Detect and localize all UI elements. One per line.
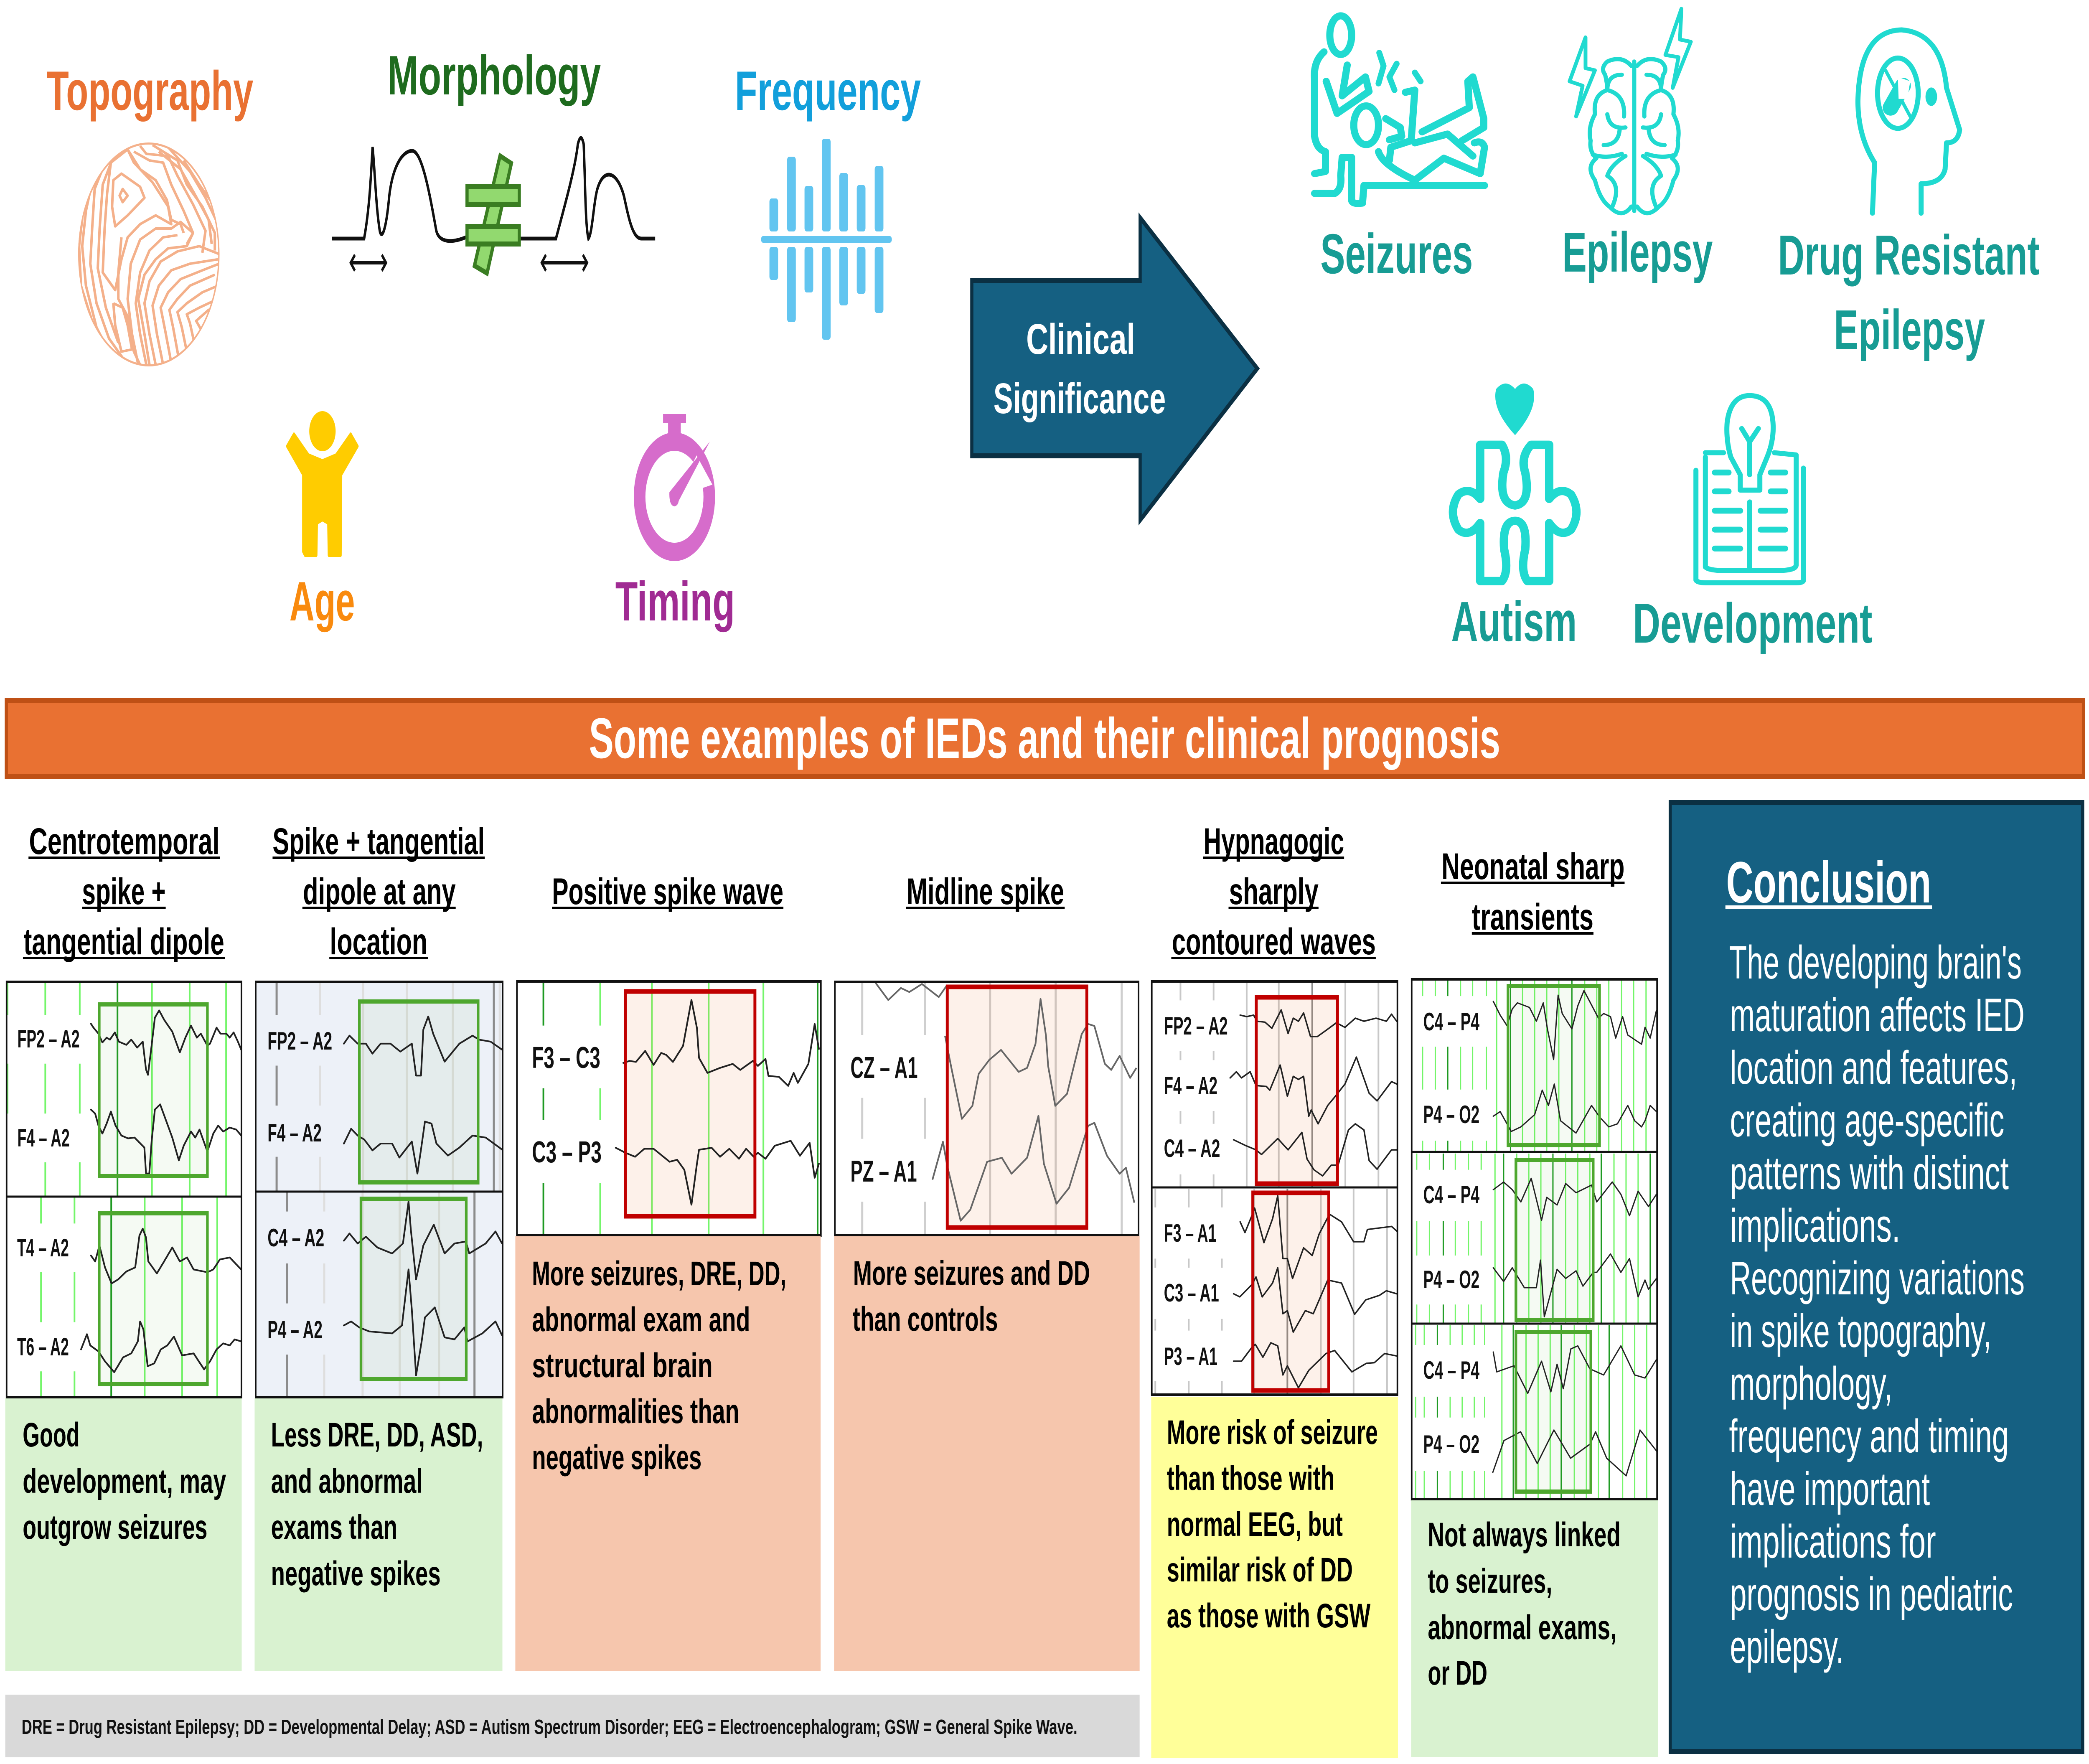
prognosis box: centrotemporal: outgrow seizures — [23, 1508, 207, 1546]
label: Drug Resistant Epilepsy: Drug Resistant — [1778, 224, 2040, 287]
icon: stopwatch (timing) — [640, 414, 712, 552]
prognosis box: spike with dipole: negative spikes — [271, 1554, 441, 1593]
column heading: Spike + tangential dipole at any location — [272, 821, 485, 962]
prognosis box: midline spike — [834, 1236, 1140, 1671]
text: conclusion body: prognosis in pediatric — [1730, 1568, 2013, 1620]
text: conclusion body: implications for — [1730, 1515, 1936, 1568]
column heading: Spike + tangential dipole at any location: location — [330, 921, 427, 962]
banner: examples of IEDs: Some examples of IEDs and their clinical prognosis — [589, 707, 1500, 770]
prognosis box: centrotemporal — [5, 1398, 242, 1671]
text: conclusion body: patterns with distinct — [1730, 1146, 2009, 1199]
heading: Age: Age — [290, 570, 355, 633]
prognosis box: neonatal: Not always linked — [1428, 1515, 1621, 1554]
prognosis box: spike with dipole: Less DRE, DD, ASD, — [271, 1416, 483, 1454]
panel: EEG centrotemporal spike: T6 – A2 — [17, 1333, 69, 1361]
text: conclusion body: location and features, — [1730, 1041, 2017, 1094]
prognosis box: positive spike wave: More seizures, DRE, DD, — [532, 1254, 786, 1293]
panel: EEG hypnagogic sharply contoured waves — [1152, 981, 1398, 1395]
arrow: clinical significance: Significance — [994, 375, 1166, 423]
heading: Morphology: Morphology — [387, 44, 601, 107]
icon: topographic contour map — [79, 143, 219, 367]
text: conclusion body: maturation affects IED — [1730, 989, 2025, 1041]
label: Drug Resistant Epilepsy: Epilepsy — [1834, 298, 1985, 361]
icon: head with crossed-out pill — [1858, 30, 1959, 213]
text: conclusion body — [1729, 936, 2025, 1673]
column heading: Hypnagogic sharply contoured waves: Hypnagogic — [1204, 821, 1344, 862]
text: conclusion body: in spike topography, — [1730, 1304, 1991, 1357]
prognosis box: neonatal: abnormal exams, — [1428, 1608, 1617, 1647]
panel: EEG positive spike wave: F3 – C3 — [532, 1040, 600, 1075]
icon: child figure (age) — [287, 411, 358, 555]
heading: Frequency: Frequency — [735, 59, 921, 122]
prognosis box: midline spike: More seizures and DD — [853, 1254, 1090, 1292]
prognosis box: spike with dipole: and abnormal — [271, 1462, 423, 1500]
legend: abbreviations: DRE = Drug Resistant Epilepsy; DD = Developmental Delay; ASD = Autism Spectrum Disorder; EEG = Electroencephalogram; GSW = General Spike Wave. — [22, 1716, 1078, 1739]
prognosis box: positive spike wave: negative spikes — [532, 1438, 701, 1477]
prognosis box: positive spike wave: abnormalities than — [532, 1392, 740, 1431]
column heading: Centrotemporal spike + tangential dipole: Centrotemporal — [29, 821, 219, 862]
panel: EEG hypnagogic sharply contoured waves: C4 – A2 — [1164, 1134, 1220, 1162]
panel: EEG neonatal sharp transients: P4 – O2 — [1423, 1101, 1479, 1129]
panel: EEG positive spike wave: C3 – P3 — [532, 1135, 602, 1169]
text: conclusion body: epilepsy. — [1730, 1620, 1844, 1673]
label: Seizures: Seizures — [1320, 222, 1473, 285]
panel: EEG spike with tangential dipole at any location: C4 – A2 — [267, 1224, 324, 1252]
icon: frequency bars — [761, 139, 892, 340]
prognosis box: spike with dipole — [254, 1398, 502, 1671]
text: conclusion body: creating age-specific — [1730, 1094, 2004, 1146]
panel: EEG midline spike: PZ – A1 — [850, 1154, 917, 1188]
prognosis box: centrotemporal: development, may — [23, 1462, 226, 1500]
panel: EEG positive spike wave — [517, 981, 821, 1235]
panel: EEG neonatal sharp transients — [1412, 979, 1657, 1500]
column heading: Hypnagogic sharply contoured waves — [1171, 821, 1376, 962]
prognosis box: hypnagogic: than those with — [1167, 1459, 1334, 1497]
label: Drug Resistant Epilepsy — [1778, 224, 2040, 361]
icon: seizures — [1314, 16, 1484, 203]
prognosis box: hypnagogic: similar risk of DD — [1167, 1550, 1353, 1589]
panel: EEG spike with tangential dipole at any location — [256, 982, 503, 1397]
column heading: Centrotemporal spike + tangential dipole: spike + — [82, 871, 166, 912]
column heading: Centrotemporal spike + tangential dipole — [23, 821, 225, 962]
prognosis box: hypnagogic: normal EEG, but — [1167, 1505, 1343, 1543]
text: conclusion body: have important — [1730, 1462, 1930, 1515]
column heading: Spike + tangential dipole at any location: dipole at any — [303, 871, 456, 912]
panel: EEG hypnagogic sharply contoured waves: F4 – A2 — [1164, 1072, 1217, 1100]
panel: EEG hypnagogic sharply contoured waves: FP2 – A2 — [1164, 1012, 1228, 1040]
prognosis box: positive spike wave: structural brain — [532, 1346, 713, 1385]
panel: EEG neonatal sharp transients: C4 – P4 — [1423, 1356, 1479, 1384]
label: Autism: Autism — [1451, 590, 1577, 653]
arrow: clinical significance — [972, 218, 1257, 520]
panel: EEG neonatal sharp transients: C4 – P4 — [1423, 1181, 1479, 1209]
column heading: Neonatal sharp transients: Neonatal sharp — [1441, 846, 1624, 887]
heading: Conclusion: Conclusion — [1726, 849, 1931, 915]
icon: puzzle piece with heart — [1453, 384, 1576, 581]
prognosis box: spike with dipole: exams than — [271, 1508, 397, 1546]
prognosis box: hypnagogic: More risk of seizure — [1167, 1413, 1378, 1451]
panel: EEG spike with tangential dipole at any location: FP2 – A2 — [267, 1027, 332, 1055]
text: conclusion body: morphology, — [1730, 1357, 1892, 1410]
prognosis box: hypnagogic: as those with GSW — [1167, 1596, 1371, 1635]
icon: open book with light bulb — [1696, 396, 1804, 583]
heading: Timing: Timing — [615, 570, 735, 633]
panel: EEG hypnagogic sharply contoured waves: P3 – A1 — [1164, 1342, 1217, 1370]
prognosis box: hypnagogic — [1151, 1397, 1398, 1758]
panel: EEG spike with tangential dipole at any location: P4 – A2 — [267, 1316, 323, 1344]
panel: EEG centrotemporal spike — [7, 982, 241, 1397]
panel: EEG midline spike: CZ – A1 — [850, 1050, 918, 1085]
heading: Topography: Topography — [47, 59, 253, 122]
arrow: clinical significance: Clinical — [1026, 315, 1135, 363]
column heading: Centrotemporal spike + tangential dipole: tangential dipole — [23, 921, 224, 962]
panel: EEG neonatal sharp transients: C4 – P4 — [1423, 1008, 1479, 1036]
panel: conclusion — [1670, 803, 2083, 1751]
banner: examples of IEDs — [6, 700, 2084, 776]
prognosis box: positive spike wave — [515, 1236, 821, 1671]
prognosis box: centrotemporal: Good — [23, 1416, 80, 1454]
column heading: Hypnagogic sharply contoured waves: contoured waves — [1172, 921, 1376, 962]
prognosis box: positive spike wave: abnormal exam and — [532, 1300, 750, 1339]
label: Epilepsy: Epilepsy — [1562, 221, 1713, 284]
panel: EEG spike with tangential dipole at any location: F4 – A2 — [267, 1119, 322, 1147]
panel: EEG neonatal sharp transients: P4 – O2 — [1423, 1430, 1479, 1458]
legend: abbreviations — [5, 1695, 1140, 1757]
prognosis box: neonatal: to seizures, — [1428, 1562, 1552, 1600]
column heading: Spike + tangential dipole at any location: Spike + tangential — [272, 821, 485, 862]
icon: brain with lightning — [1570, 9, 1691, 213]
panel: EEG midline spike — [835, 982, 1139, 1235]
icon: morphology waveforms with not-equal sign — [332, 138, 655, 273]
column heading: Hypnagogic sharply contoured waves: sharply — [1229, 871, 1319, 912]
prognosis box: midline spike: than controls — [853, 1300, 998, 1338]
label: Development: Development — [1633, 592, 1872, 655]
panel: EEG centrotemporal spike: FP2 – A2 — [18, 1025, 80, 1053]
column heading: Positive spike wave: Positive spike wave — [552, 871, 783, 912]
column heading: Neonatal sharp transients: transients — [1472, 896, 1593, 938]
prognosis box: neonatal: or DD — [1428, 1654, 1487, 1692]
panel: EEG hypnagogic sharply contoured waves: F3 – A1 — [1164, 1219, 1216, 1247]
text: conclusion body: The developing brain's — [1729, 936, 2022, 989]
column heading: Neonatal sharp transients — [1441, 846, 1624, 938]
prognosis box: neonatal — [1411, 1500, 1658, 1757]
panel: EEG centrotemporal spike: F4 – A2 — [18, 1124, 70, 1152]
panel: EEG neonatal sharp transients: P4 – O2 — [1423, 1266, 1479, 1294]
panel: EEG centrotemporal spike: T4 – A2 — [17, 1234, 69, 1262]
text: conclusion body: implications. — [1730, 1199, 1900, 1252]
text: conclusion body: Recognizing variations — [1730, 1252, 2025, 1304]
panel: EEG hypnagogic sharply contoured waves: C3 – A1 — [1164, 1279, 1219, 1307]
column heading: Midline spike: Midline spike — [907, 871, 1064, 912]
text: conclusion body: frequency and timing — [1729, 1410, 2009, 1462]
